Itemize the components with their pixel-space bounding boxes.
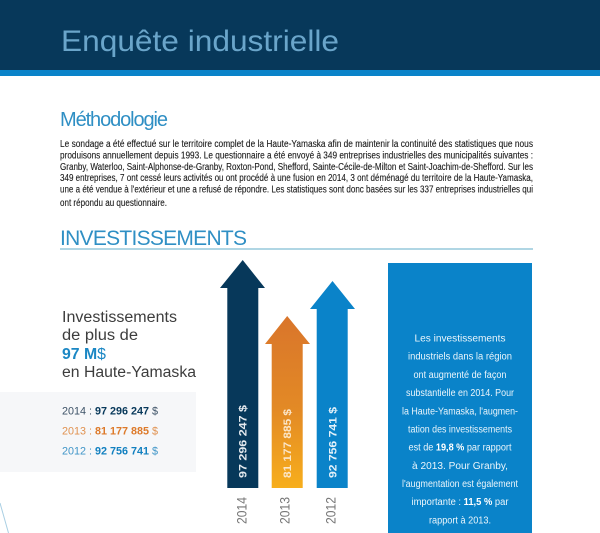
summary heading: investissements de plus de 97 M$: en Haute-Yamaska — [62, 364, 196, 381]
summary heading: investissements de plus de 97 M$ — [62, 309, 196, 381]
panel: commentary: la Haute-Yamaska, l'augmen- — [402, 406, 518, 418]
methodology text block: ont répondu au questionnaire. — [60, 198, 167, 209]
total 2012: 2012 : 92 756 741 $ — [62, 446, 158, 458]
panel: commentary: Les investissements — [414, 334, 506, 344]
panel: commentary: industriels dans la région — [408, 352, 512, 362]
axis labels: years: 2013 — [278, 497, 292, 524]
arrow: 2014: 97 296 247 $ — [238, 405, 250, 478]
heading: méthodologie: Méthodologie — [60, 109, 168, 131]
arrow: 2013 — [265, 316, 310, 488]
total 2013: 2013 : 81 177 885 $ — [62, 426, 158, 438]
axis labels: years: 2012 — [324, 497, 338, 524]
arrow: 2014 — [220, 260, 265, 488]
panel: commentary: importante : 11,5 % par — [412, 497, 509, 508]
panel: commentary: est de 19,8 % par rapport — [408, 442, 512, 454]
panel: commentary: l'augmentation est également — [402, 479, 518, 490]
axis labels: years — [234, 497, 338, 524]
arrow: 2012 — [310, 281, 355, 488]
axis labels: years: 2014 — [234, 497, 250, 524]
total 2014: 2014 : 97 296 247 $ — [62, 406, 158, 418]
panel: commentary — [388, 263, 532, 533]
heading: investissements: INVESTISSEMENTS — [60, 227, 247, 250]
title: Enquête industrielle — [61, 25, 339, 58]
arrow: 2012: 92 756 741 $ — [328, 407, 340, 478]
panel: commentary: tation des investissements — [408, 424, 512, 436]
panel: yearly totals — [0, 392, 196, 472]
panel: commentary: à 2013. Pour Granby, — [412, 461, 508, 472]
summary heading: investissements de plus de 97 M$: Investissements — [62, 309, 177, 326]
decorative corner line — [0, 503, 8, 533]
methodology text block — [60, 139, 533, 209]
panel: commentary: substantielle en 2014. Pour — [406, 388, 515, 399]
summary heading: investissements de plus de 97 M$: de plus de — [62, 327, 138, 344]
summary heading: investissements de plus de 97 M$: 97 M$ — [62, 346, 106, 363]
panel: commentary: rapport à 2013. — [429, 516, 491, 526]
arrow: 2013: 81 177 885 $ — [282, 409, 294, 478]
methodology text block: Le sondage a été effectué sur le territoire complet de la Haute-Yamaska afin de maintenir la continuité des statistiques que nous — [60, 139, 533, 150]
header banner — [0, 0, 600, 76]
panel: commentary: ont augmenté de façon — [414, 370, 506, 381]
